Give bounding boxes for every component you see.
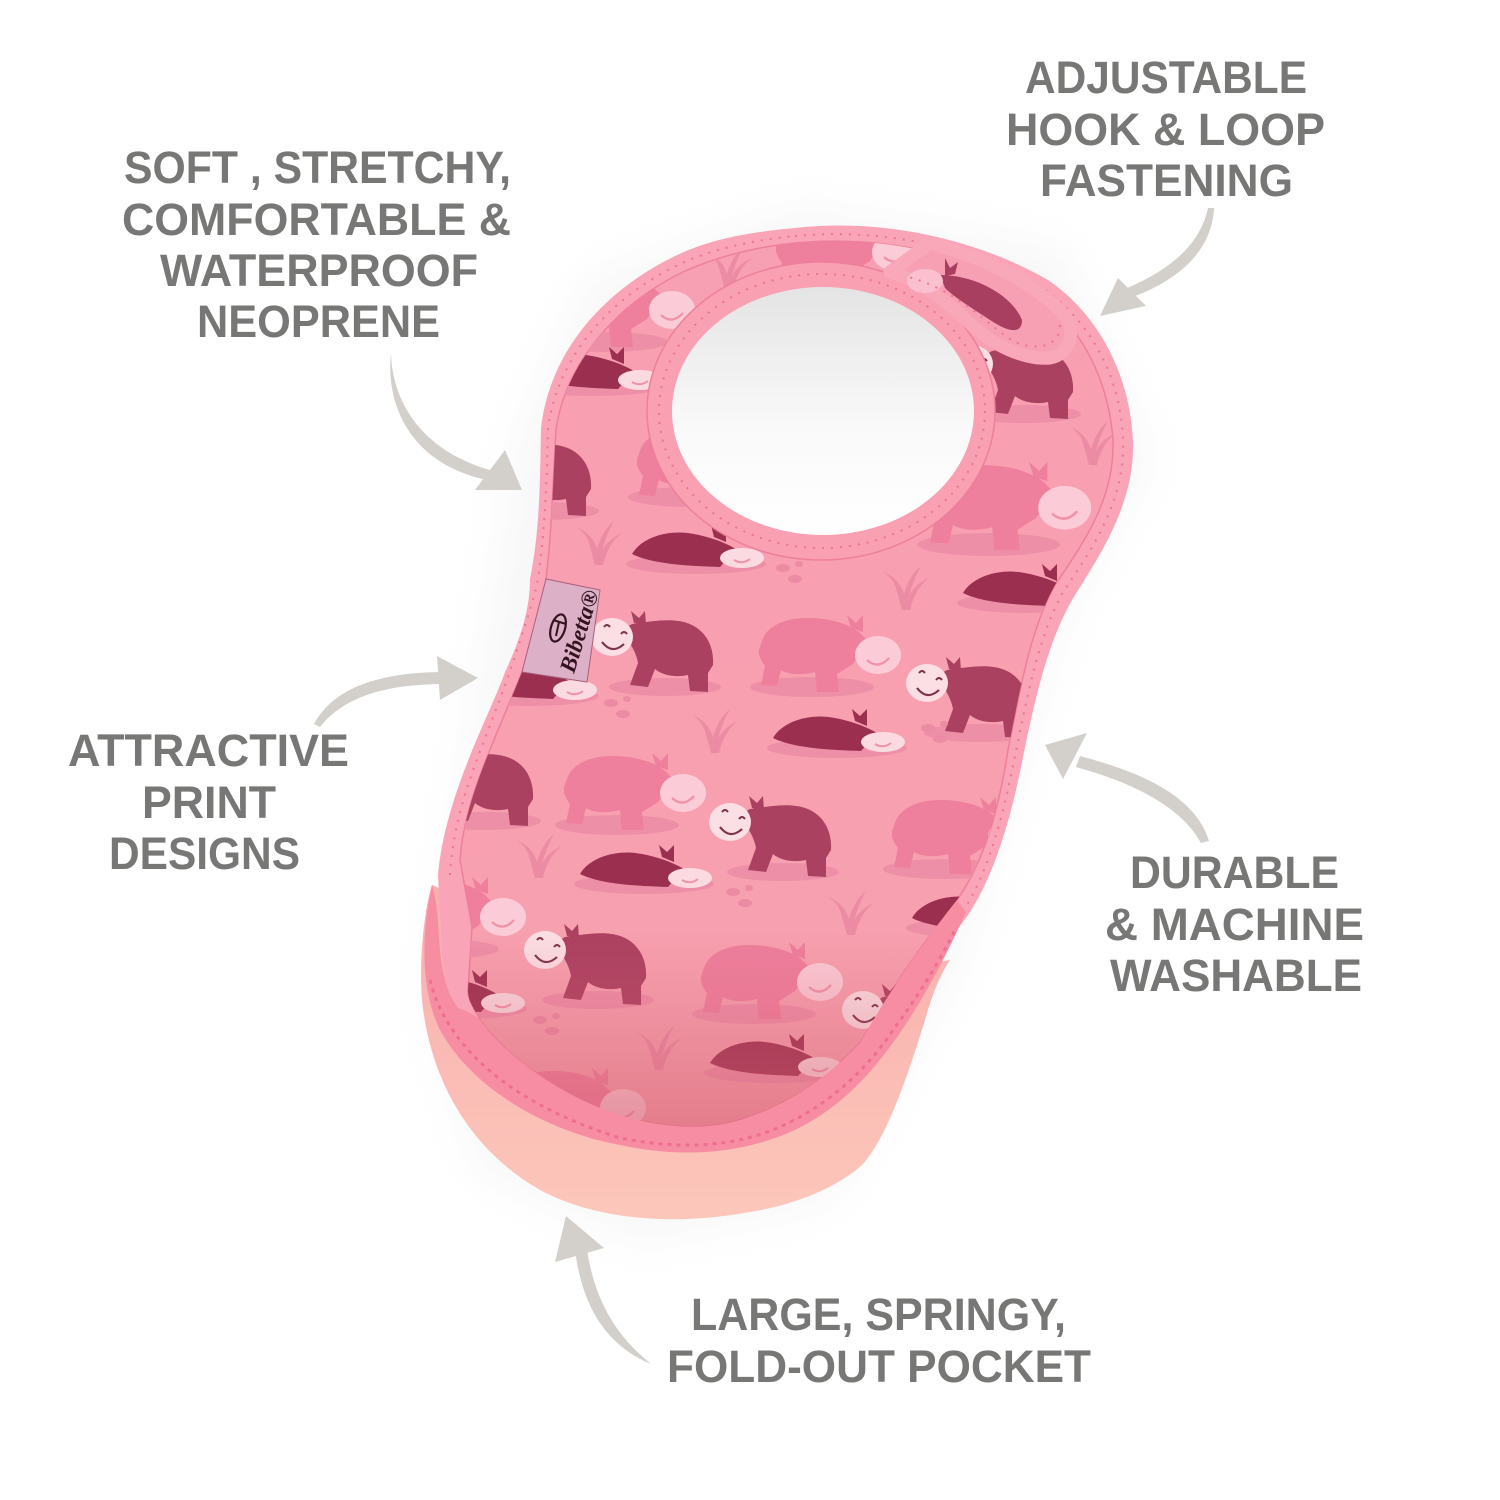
fold-out pocket [421, 885, 950, 1219]
label: adjustable hook and loop fastening [1006, 52, 1325, 206]
label: soft stretchy neoprene: SOFT , STRETCHY, [124, 142, 511, 193]
label: soft stretchy neoprene: WATERPROOF [160, 245, 478, 296]
label: attractive print designs: PRINT [142, 777, 276, 828]
rim stitching [430, 930, 955, 1145]
label: attractive print designs [68, 725, 349, 879]
soft shadow under bib [430, 210, 1150, 1240]
arrow: to neoprene [390, 353, 522, 490]
label: large springy fold-out pocket: LARGE, SPRINGY, [691, 1289, 1066, 1340]
neck hole [672, 287, 974, 535]
bib product photo [375, 212, 1133, 1219]
hippo print pattern [375, 212, 1116, 1150]
bib printed face [460, 241, 1113, 1127]
neck stitching [659, 274, 985, 548]
outer stitching [450, 234, 1123, 908]
arrow: to durable [1045, 733, 1209, 843]
label: durable and machine washable [1105, 847, 1364, 1001]
label: soft stretchy neoprene [122, 142, 511, 347]
label: large springy fold-out pocket: FOLD-OUT POCKET [667, 1341, 1091, 1392]
label: attractive print designs: ATTRACTIVE [68, 725, 349, 776]
label: durable and machine washable: DURABLE [1130, 847, 1339, 898]
brand label tag: Bibetta® [555, 587, 604, 676]
label: soft stretchy neoprene: NEOPRENE [197, 296, 440, 347]
adjustable strap [890, 243, 1071, 358]
pocket rim [424, 885, 966, 1153]
label: durable and machine washable: & MACHINE [1105, 899, 1364, 950]
label: attractive print designs: DESIGNS [109, 828, 300, 879]
bib outer binding [438, 225, 1133, 1140]
arrow: to print [314, 656, 478, 727]
arrow: to fastening [1100, 208, 1214, 316]
arrow: to pocket [555, 1216, 651, 1364]
label: adjustable hook and loop fastening: ADJUSTABLE [1025, 52, 1307, 103]
label: adjustable hook and loop fastening: FASTENING [1040, 155, 1293, 206]
brand label tag [522, 579, 604, 682]
neck hole binding [647, 262, 995, 560]
label: large springy fold-out pocket [667, 1289, 1091, 1392]
label: soft stretchy neoprene: COMFORTABLE & [122, 194, 511, 245]
label: durable and machine washable: WASHABLE [1110, 950, 1362, 1001]
label: adjustable hook and loop fastening: HOOK & LOOP [1006, 104, 1325, 155]
